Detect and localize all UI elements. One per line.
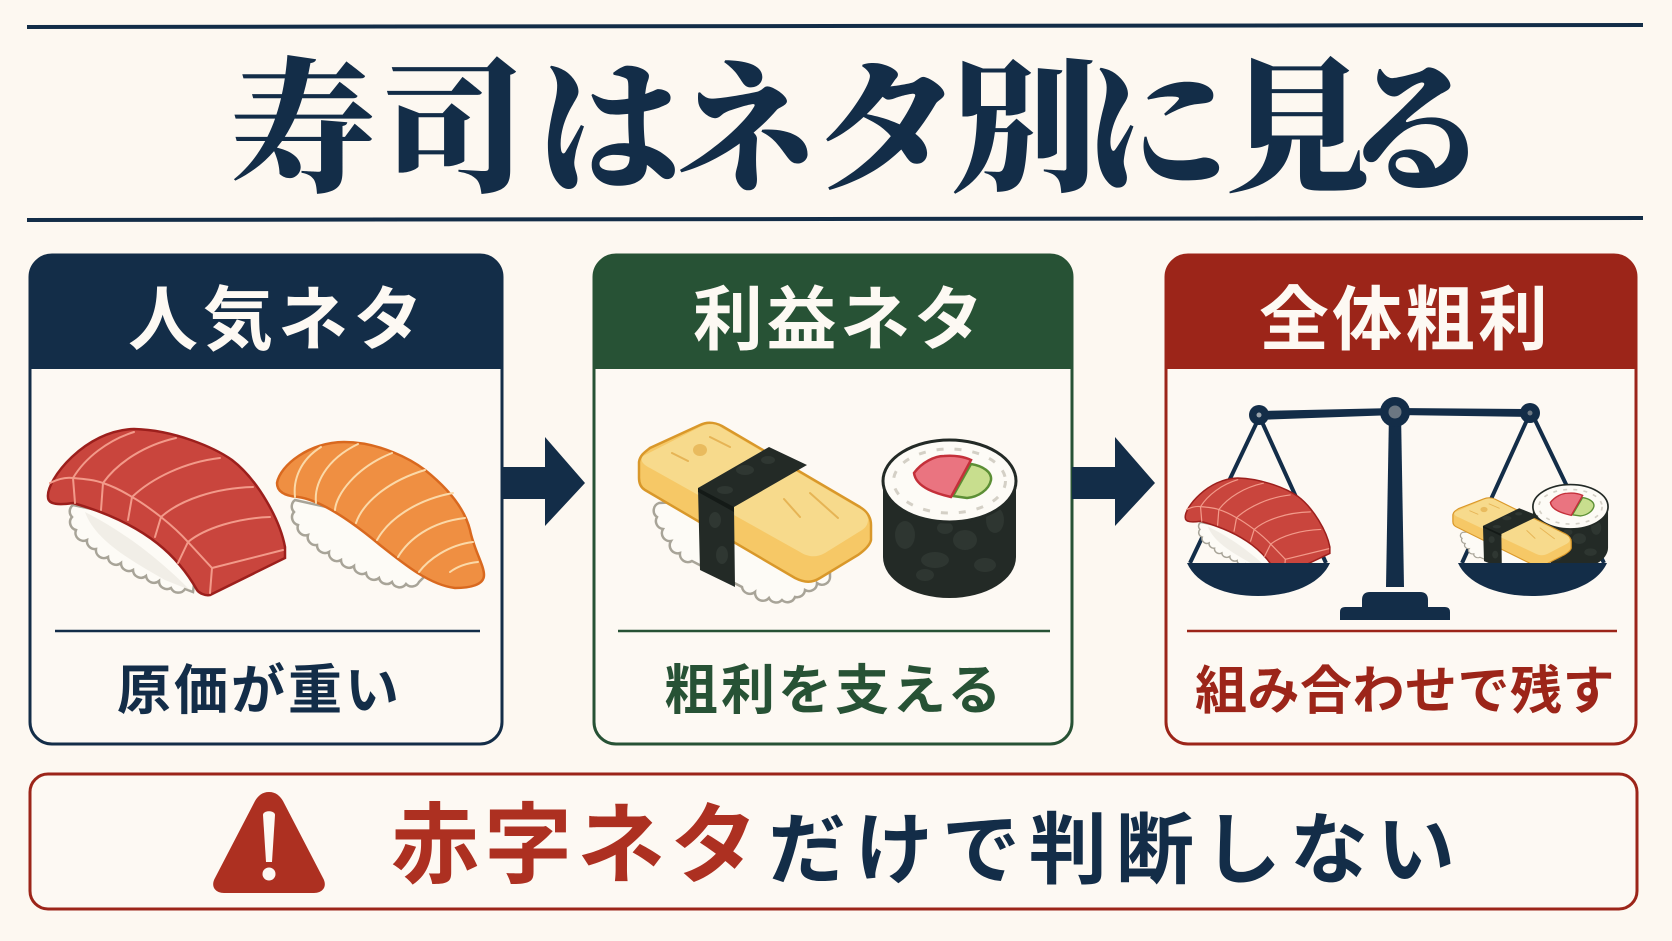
callout: warning banner (30, 774, 1637, 909)
text: 赤字ネタ: 赤字ネタ (391, 796, 763, 895)
text: だけで判断しない: だけで判断しない (768, 806, 1464, 894)
icon: maki roll (883, 440, 1016, 598)
caption: 組み合わせで残す: 組み合わせで残す (1195, 663, 1615, 721)
icon: warning triangle (213, 792, 325, 893)
icon: salmon nigiri (277, 442, 484, 588)
panel header: 全体粗利 (1166, 255, 1636, 369)
panel: 利益ネタ (594, 255, 1072, 744)
panel header: 人気ネタ (30, 255, 502, 369)
panel header: 利益ネタ (594, 255, 1072, 369)
caption: 粗利を支える: 粗利を支える (664, 661, 1004, 721)
panel: 人気ネタ (30, 255, 502, 744)
icon: tamago nigiri (639, 423, 871, 602)
heading: 利益ネタ: 利益ネタ (693, 281, 987, 359)
arrow: to 利益ネタ (502, 437, 585, 526)
heading: 全体粗利: 全体粗利 (1259, 281, 1551, 359)
icon: tuna nigiri (48, 429, 285, 595)
caption: 原価が重い: 原価が重い (117, 661, 402, 721)
icon: balance scale with sushi (1185, 397, 1608, 620)
arrow: to 全体粗利 (1072, 437, 1155, 526)
panel: 全体粗利 (1166, 255, 1636, 744)
heading: 人気ネタ: 人気ネタ (128, 281, 428, 359)
title: 寿司はネタ別に見る (231, 52, 1490, 212)
